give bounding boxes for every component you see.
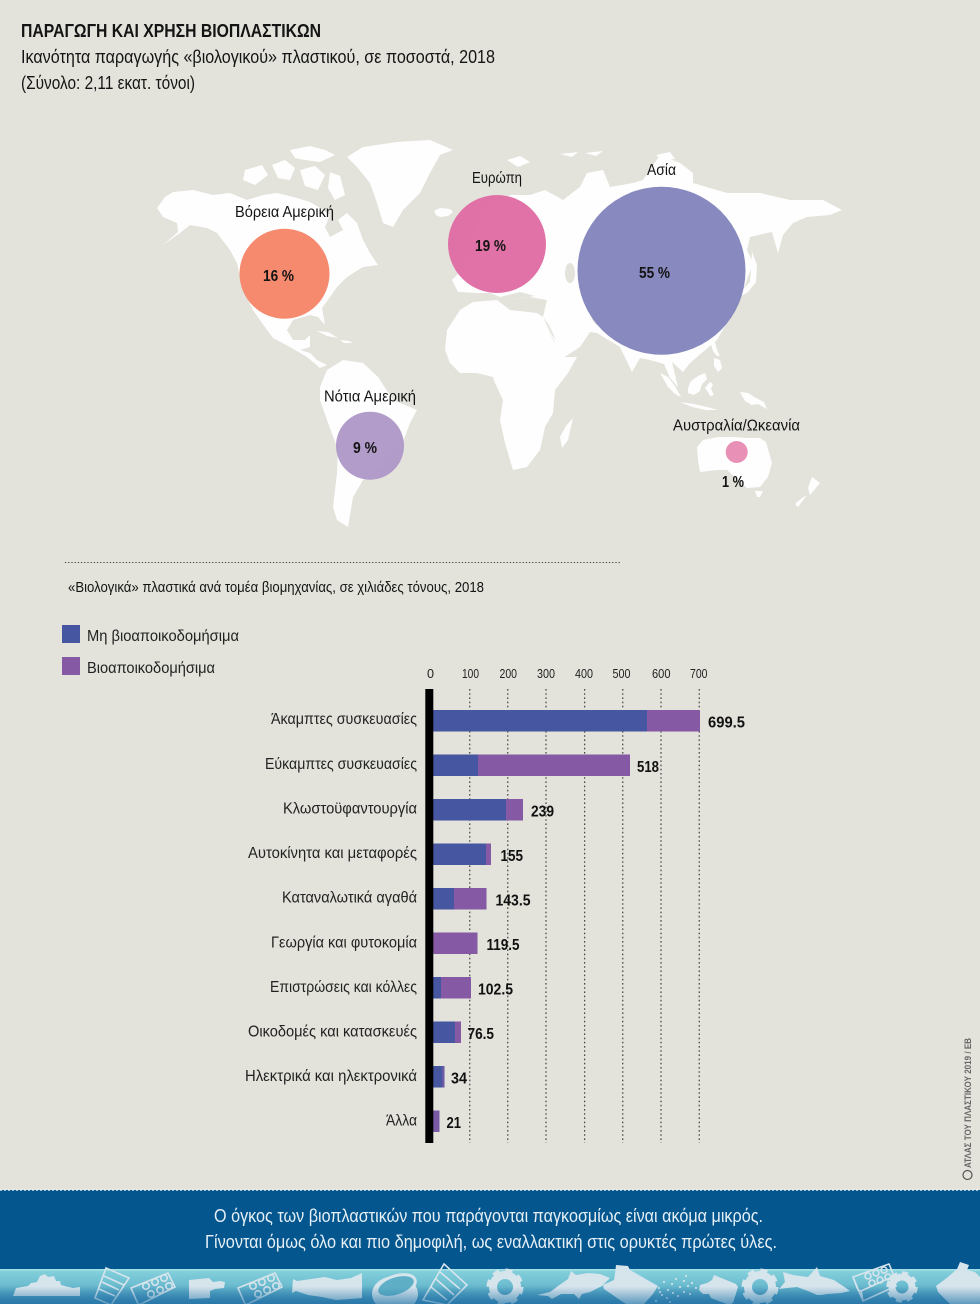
title block <box>21 21 495 93</box>
icon: crumpled bottle <box>292 1273 362 1300</box>
icon: bottle <box>189 1278 225 1299</box>
bubble: Europe: 19 % <box>475 238 506 255</box>
bubble: Asia <box>578 162 746 355</box>
Japan <box>738 252 757 298</box>
bubble: Asia: Ασία <box>647 162 676 179</box>
microplastic dots <box>655 1275 697 1303</box>
Iceland <box>434 208 453 217</box>
bar: textiles: 239 <box>531 804 554 820</box>
bar: textiles <box>283 799 554 820</box>
bar: automotive and transport: 155 <box>500 848 523 865</box>
Southeast Asia islands <box>660 342 767 410</box>
axis labels: 500 <box>612 667 631 681</box>
decorative icon strip <box>0 1262 980 1304</box>
icon: toy brick <box>238 1273 282 1304</box>
bar: other <box>386 1110 461 1132</box>
baseline axis <box>425 689 433 1143</box>
Arctic islands <box>243 146 345 200</box>
icon: plastic bag <box>603 1265 658 1304</box>
axis labels: 600 <box>652 667 671 681</box>
Africa <box>445 300 577 470</box>
axis labels: 700 <box>690 667 708 681</box>
Arctic Russia islands <box>507 151 675 167</box>
bar: building and construction <box>248 1022 494 1043</box>
icon: plastic cup <box>423 1264 467 1304</box>
axis labels <box>427 667 708 681</box>
subtitle: Ικανότητα παραγωγής «βιολογικού» πλαστικού, σε ποσοστά, 2018 <box>21 47 495 67</box>
bubble: Asia: 55 % <box>639 265 670 282</box>
icon: gear <box>744 1270 776 1304</box>
Greenland <box>347 140 453 227</box>
bar: consumer goods <box>282 888 531 910</box>
bubble: Australia and Oceania: 1 % <box>722 474 744 491</box>
axis labels: 0 <box>427 667 434 681</box>
legend <box>62 625 239 677</box>
bar: automotive and transport <box>248 844 523 865</box>
bar chart <box>245 667 745 1143</box>
bubble: North America <box>235 204 334 319</box>
axis labels: 300 <box>537 667 555 681</box>
bar: agriculture and horticulture <box>271 932 520 954</box>
Cuba and Caribbean <box>317 331 353 343</box>
icon: fish <box>779 1267 850 1295</box>
bar: rigid packaging <box>271 710 745 732</box>
bar: coatings and adhesives: Επιστρώσεις και κόλλες <box>270 979 417 996</box>
icon: toy brick <box>853 1264 896 1301</box>
bubble: South America <box>324 388 416 480</box>
inland seas <box>500 263 605 340</box>
total note: (Σύνολο: 2,11 εκατ. τόνοι) <box>21 73 195 93</box>
bottom message banner <box>0 1190 980 1270</box>
bar: agriculture and horticulture: 119.5 <box>486 937 520 954</box>
bar: flexible packaging <box>265 754 659 776</box>
legend: biodegradable: Βιοαποικοδομήσιμα <box>87 660 215 677</box>
legend: biodegradable <box>62 657 215 677</box>
icon: fish <box>537 1271 610 1299</box>
bubble: Europe: Ευρώπη <box>472 170 522 187</box>
bubble: South America: Νότια Αμερική <box>324 388 416 406</box>
legend: non-biodegradable <box>62 625 239 645</box>
axis labels: 100 <box>462 667 479 681</box>
bar: rigid packaging: 699.5 <box>708 714 745 732</box>
bar: consumer goods: 143.5 <box>496 892 531 910</box>
South America <box>320 360 417 527</box>
Tasmania and New Zealand <box>755 477 820 507</box>
bar: electrical and electronics <box>245 1066 467 1088</box>
bar: rigid packaging: Άκαμπτες συσκευασίες <box>271 711 417 728</box>
bar: coatings and adhesives <box>270 977 513 998</box>
banner line 1: Ο όγκος των βιοπλαστικών που παράγονται παγκοσμίως είναι ακόμα μικρός. <box>214 1206 763 1226</box>
bubble: North America: 16 % <box>263 268 294 285</box>
axis labels: 200 <box>500 667 517 681</box>
legend: non-biodegradable: Μη βιοαποικοδομήσιμα <box>87 628 239 645</box>
bar: other: Άλλα <box>386 1112 417 1130</box>
source credit: ΑΤΛΑΣ ΤΟΥ ΠΛΑΣΤΙΚΟΥ 2019 / ΕΒ <box>963 1038 973 1168</box>
bar: coatings and adhesives: 102.5 <box>478 982 513 998</box>
title: ΠΑΡΑΓΩΓΗ ΚΑΙ ΧΡΗΣΗ ΒΙΟΠΛΑΣΤΙΚΩΝ <box>21 21 321 41</box>
Eurasia <box>452 155 842 387</box>
bubble: South America: 9 % <box>353 440 377 457</box>
chart heading: «Βιολογικά» πλαστικά ανά τομέα βιομηχανίας, σε χιλιάδες τόνους, 2018 <box>68 579 484 596</box>
icon: bottle <box>699 1275 738 1304</box>
bar: flexible packaging: Εύκαμπτες συσκευασίες <box>265 756 417 773</box>
Australia <box>697 437 772 488</box>
bar: automotive and transport: Αυτοκίνητα και μεταφορές <box>248 845 417 862</box>
bubble: Australia and Oceania: Αυστραλία/Ωκεανία <box>673 418 800 434</box>
bubble: Australia and Oceania <box>673 418 800 491</box>
bar: textiles: Κλωστοϋφαντουργία <box>283 800 417 818</box>
bar: consumer goods: Καταναλωτικά αγαθά <box>282 890 417 906</box>
icon: plastic bag <box>936 1262 980 1304</box>
icon: tyre <box>372 1270 418 1304</box>
bubble: Europe <box>448 170 546 293</box>
bar: electrical and electronics: Ηλεκτρικά και ηλεκτρονικά <box>245 1068 417 1085</box>
world map <box>157 140 842 527</box>
bubble: North America: Βόρεια Αμερική <box>235 204 334 221</box>
Madagascar <box>560 418 573 448</box>
icon: gear <box>888 1273 916 1301</box>
North America <box>157 190 378 368</box>
icon: gear <box>488 1270 522 1304</box>
icon: ship <box>13 1274 80 1296</box>
bar: building and construction: 76.5 <box>468 1026 494 1043</box>
bar: other: 21 <box>446 1115 461 1132</box>
banner line 2: Γίνονται όμως όλο και πιο δημοφιλή, ως εναλλακτική στις ορυκτές πρώτες ύλες. <box>205 1232 777 1252</box>
axis labels: 400 <box>575 667 593 681</box>
icon: plastic cup <box>95 1268 129 1304</box>
bar: electrical and electronics: 34 <box>451 1070 467 1088</box>
icon: toy brick <box>131 1273 175 1304</box>
bar: flexible packaging: 518 <box>637 759 659 776</box>
bar: agriculture and horticulture: Γεωργία και φυτοκομία <box>271 934 417 952</box>
bar: building and construction: Οικοδομές και κατασκευές <box>248 1024 417 1040</box>
